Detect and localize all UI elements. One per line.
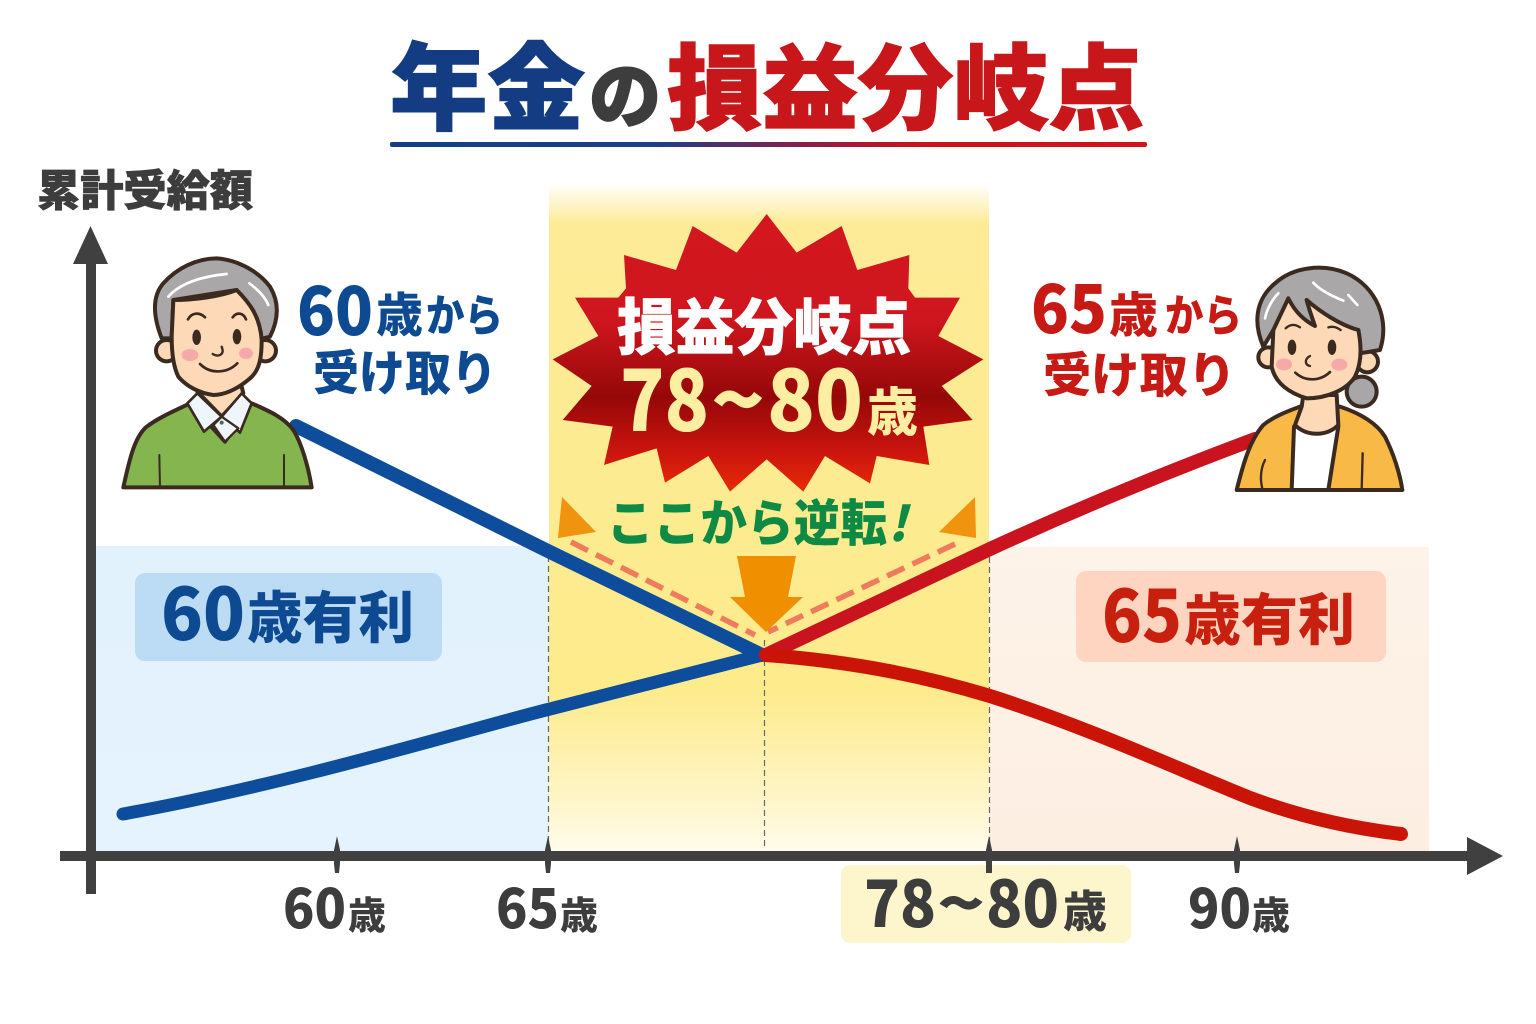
line: 60歳 rising blue [123, 655, 762, 814]
text: 60歳から受け取り: 60 [297, 259, 373, 355]
tick: 78〜80歳: 80 [986, 854, 1059, 946]
y axis [73, 226, 108, 894]
text: 60歳から受け取り: 歳 [376, 277, 423, 346]
tick: 90歳: 歳 [1252, 885, 1290, 940]
line: 65歳 falling red [766, 655, 1401, 834]
starburst: 損益分岐点 78〜80歳: 損益分岐点 [617, 278, 911, 367]
panel: 60歳有利 region [96, 546, 549, 851]
starburst: 損益分岐点 78〜80歳: ~ [711, 335, 765, 456]
text: 65歳から受け取り: から [1165, 280, 1242, 344]
tick: 78〜80歳: 78 [864, 854, 936, 946]
label: 65歳有利: 歳有利 [1184, 576, 1355, 657]
icon: older man [123, 258, 312, 487]
tick: 60歳 [283, 865, 386, 944]
tick: 78〜80歳 [864, 854, 1107, 946]
tick: 90歳 [1188, 865, 1290, 944]
text: 65歳から受け取り: 受け取り [1043, 336, 1236, 406]
tick: 65歳: 65 [496, 865, 559, 944]
title: の [589, 38, 661, 143]
arrow: left dashed guide [571, 542, 755, 635]
tick: 65歳 [496, 865, 598, 944]
starburst: 損益分岐点 78〜80歳: 歳 [867, 371, 918, 446]
x axis [60, 837, 1503, 875]
label: 60歳有利: 60 [161, 556, 245, 661]
arrow: left orange triangle [558, 497, 596, 538]
starburst: 損益分岐点 78〜80歳: 78 [620, 335, 709, 456]
text: 60歳から受け取り [297, 259, 503, 404]
axis label: 78〜80歳 highlight [841, 865, 1131, 943]
tick: 60歳: 60 [283, 865, 346, 944]
tick: 60歳: 歳 [348, 885, 386, 940]
callout: ここから逆転!: ここから逆転 [607, 484, 887, 556]
label: 60歳有利: 歳有利 [247, 574, 414, 655]
tick: 90歳: 90 [1188, 865, 1251, 944]
label: 60歳有利 [135, 556, 442, 661]
text: 65歳から受け取り [1031, 257, 1242, 406]
line: 65歳 rising red [766, 439, 1255, 655]
text: 60歳から受け取り: から [426, 280, 503, 344]
arrow: right orange triangle [939, 497, 976, 538]
icon: older woman [1237, 268, 1402, 490]
text: 60歳から受け取り: 受け取り [313, 334, 497, 404]
tick: 78〜80歳: 歳 [1063, 876, 1107, 940]
chart lines [123, 426, 1401, 834]
label: 65歳有利 [1076, 558, 1386, 663]
title: 損益分岐点 [667, 14, 1144, 149]
tick: 65歳: 歳 [560, 885, 598, 940]
starburst: 損益分岐点 78〜80歳: 80 [767, 335, 863, 456]
axes [60, 226, 1503, 894]
title: 年金 [390, 13, 585, 150]
line: 60歳 falling blue [296, 426, 762, 655]
arrow: right dashed guide [768, 544, 955, 632]
axis label: 累計受給額: 累計受給額 [37, 157, 253, 219]
text: 65歳から受け取り: 歳 [1109, 276, 1158, 346]
tick labels [283, 854, 1290, 946]
panel: 65歳有利 region [989, 547, 1429, 851]
arrow: down orange arrow [730, 556, 803, 632]
title [390, 13, 1147, 150]
tick: 78〜80歳: ~ [937, 854, 985, 946]
label: 65歳有利: 65 [1102, 558, 1182, 663]
panel: 損益分岐点 band [549, 183, 989, 851]
starburst: 損益分岐点 78〜80歳 [553, 214, 983, 492]
ticks [334, 836, 1240, 873]
callout: ここから逆転!: ! [888, 485, 912, 555]
text: 65歳から受け取り: 65 [1031, 257, 1107, 353]
